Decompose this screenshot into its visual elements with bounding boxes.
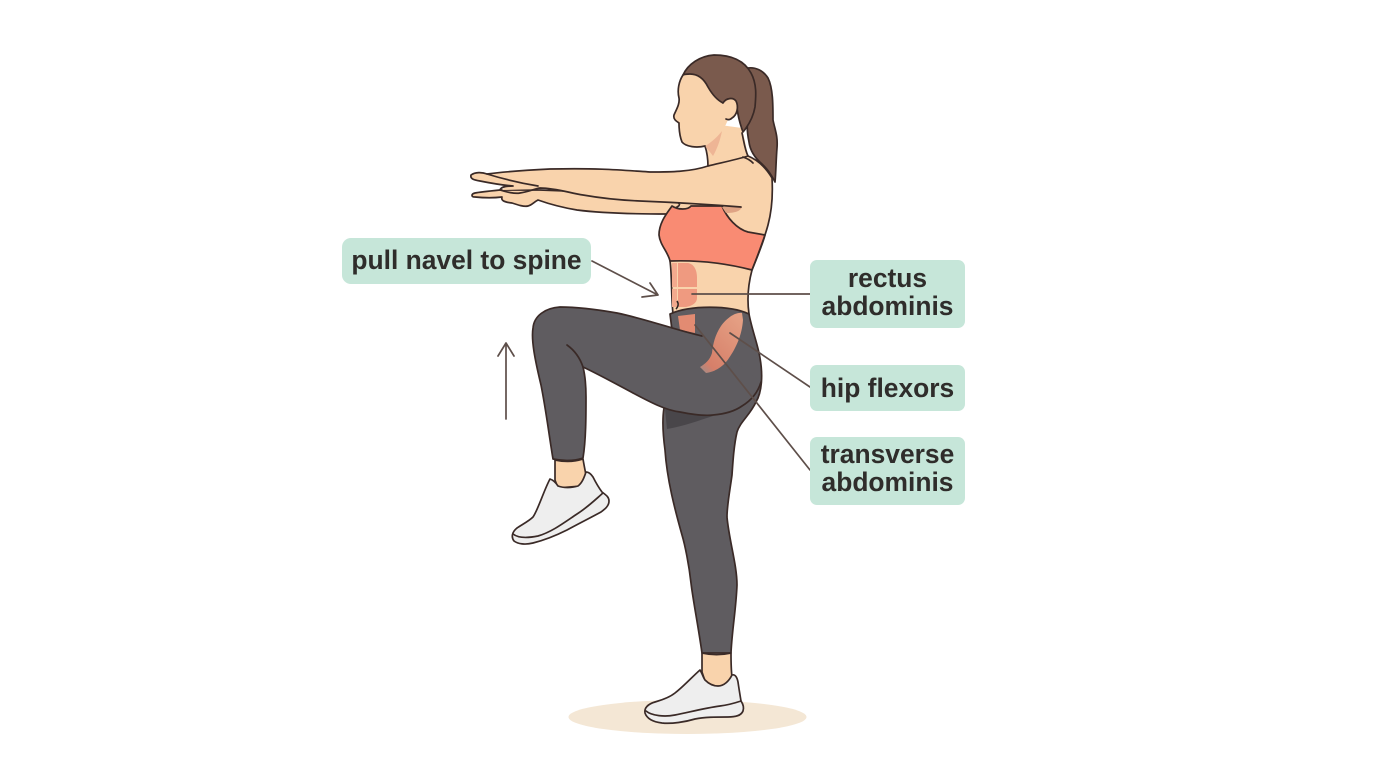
knee crease: [567, 345, 583, 367]
hip flexor upper strip: [678, 314, 695, 333]
label: hip flexors: hip flexors: [821, 373, 954, 403]
leader line: transverse abdominis: [695, 325, 810, 470]
near arm and hand outline: [471, 156, 748, 207]
finger line: [487, 174, 538, 186]
standing ankle: [702, 653, 732, 690]
near arm fill: [471, 156, 772, 207]
underarm shadow: [722, 207, 742, 213]
raised foot shoe: [512, 472, 609, 544]
hair: [683, 55, 756, 132]
neck back line: [742, 133, 748, 156]
standing shoe sole line: [646, 701, 741, 716]
standing leg: [663, 307, 762, 653]
standing foot shoe: [645, 670, 743, 723]
face profile line: [674, 75, 705, 147]
ground shadow: [568, 700, 806, 734]
label: hip flexors: [810, 365, 965, 411]
label: pull navel to spine: [342, 238, 591, 284]
bra strap: [743, 157, 753, 163]
label: rectus abdominis: abdominis: [822, 291, 953, 321]
arrow: knee lift up: [498, 343, 514, 419]
label: rectus abdominis: [810, 260, 965, 328]
neck and torso skin: [670, 125, 772, 314]
hip flexors highlight: [700, 313, 743, 373]
ponytail: [747, 68, 777, 182]
ear: [723, 99, 737, 120]
arrow: pull navel to spine: [592, 261, 658, 297]
back contour: [748, 156, 772, 314]
label: rectus abdominis: rectus: [848, 263, 927, 293]
raised shoe sole line: [513, 493, 603, 537]
far arm: [472, 190, 680, 214]
bra top: [659, 206, 765, 270]
label: transverse abdominis: abdominis: [822, 467, 953, 497]
raised thigh and shin: [532, 307, 761, 460]
label: pull navel to spine: pull navel to spine: [351, 245, 582, 275]
thigh shadow: [665, 409, 713, 429]
leader line: rectus abdominis: [692, 293, 810, 295]
head and face: [674, 62, 737, 147]
leader line: hip flexors: [730, 333, 810, 387]
waist front contour: [670, 261, 673, 314]
rectus abdominis highlight: [672, 263, 697, 307]
navel mark: [676, 301, 678, 309]
neck shadow: [705, 131, 722, 156]
figure: woman doing standing knee raise: [471, 55, 777, 723]
neck front line: [705, 146, 708, 167]
raised ankle: [555, 459, 586, 488]
label: transverse abdominis: transverse: [821, 439, 954, 469]
label: transverse abdominis: [810, 437, 965, 505]
